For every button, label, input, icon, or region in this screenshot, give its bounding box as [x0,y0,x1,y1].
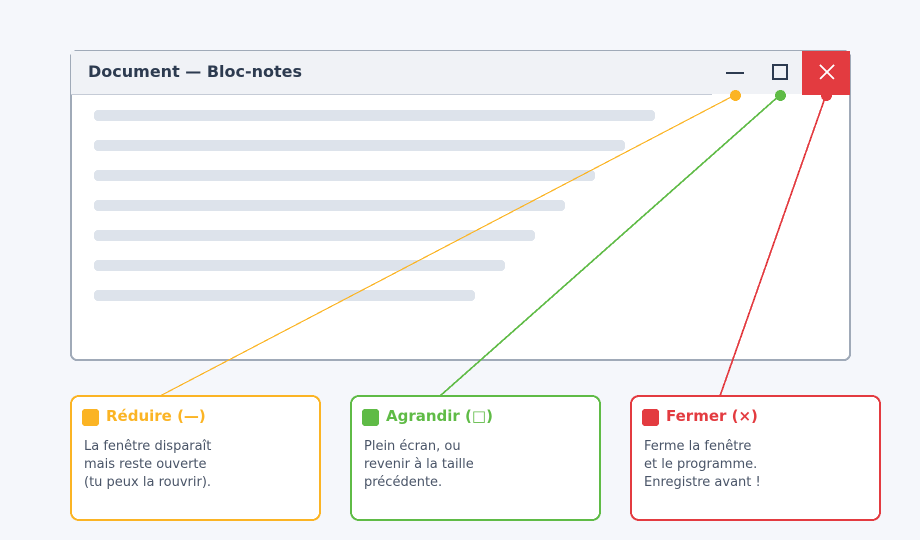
title bar [71,51,850,95]
panel: close explanation [631,396,880,520]
icon: yellow swatch [82,409,99,426]
icon: green swatch [362,409,379,426]
panel: minimize explanation [71,396,320,520]
text: maximize description: revenir à la taille [364,457,474,472]
heading: Fermer: Fermer (×) [666,407,758,425]
panel: maximize explanation [351,396,600,520]
icon: red swatch [642,409,659,426]
heading: Agrandir: Agrandir (□) [386,407,493,425]
panel: application window [71,51,850,360]
icon: close button [802,51,850,95]
text: close description: Ferme la fenêtre [644,439,751,454]
arrow: minimize connector [160,90,741,396]
text: close description: Enregistre avant ! [644,475,761,490]
arrow: close connector [720,90,832,396]
text: minimize description: La fenêtre disparaît [84,439,211,454]
icon: minimize button [726,72,744,74]
text: maximize description: Plein écran, ou [364,439,461,454]
window title: Document — Bloc-notes [88,62,302,81]
text: minimize description: (tu peux la rouvrir). [84,475,211,490]
icon: maximize button [773,65,787,79]
arrow: maximize connector [440,90,786,396]
document text lines [94,110,655,301]
text: maximize description: précédente. [364,475,442,490]
heading: Réduire: Réduire (—) [106,407,206,425]
text: close description: et le programme. [644,457,757,472]
text: minimize description: mais reste ouverte [84,457,207,472]
